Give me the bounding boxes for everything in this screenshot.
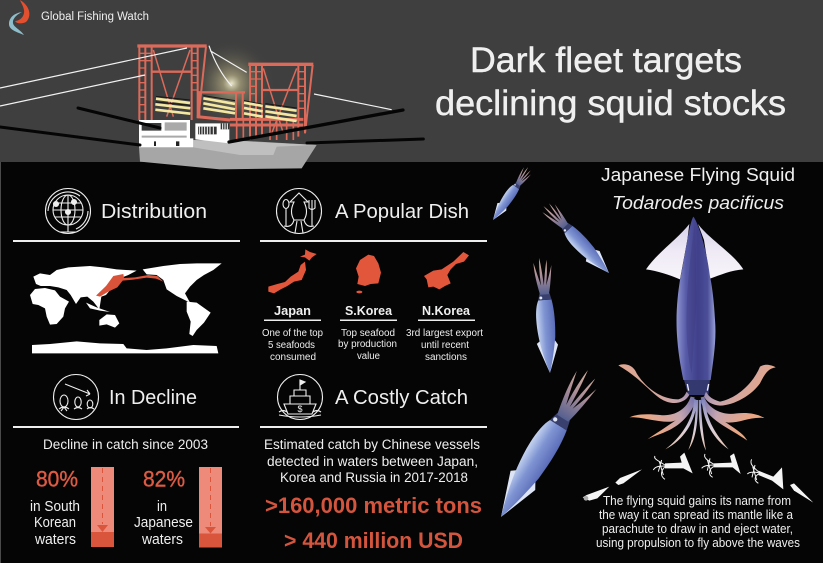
label: Japan: One of the top [262,328,323,339]
icon: ship with dollar sign [278,374,322,420]
icon: ship with dollar sign: $ [297,404,303,414]
illustration: flying squid sequence silhouettes [583,453,813,503]
label: Japan [262,303,323,363]
label: N.Korea: N.Korea [422,303,471,318]
heading: Distribution: Distribution [101,200,207,223]
bar: 80% decline [91,467,114,547]
illustration: large Japanese flying squid [618,217,776,451]
icon: squid with fork and spoon [276,188,322,234]
caption: flying squid: the way it can spread its mantle like a [599,508,793,522]
species title [601,164,795,213]
illustration: squid fishing vessel [0,40,423,169]
logo: Global Fishing Watch: Global Fishing Watch [41,11,149,23]
fins [646,224,689,279]
header band [0,0,823,162]
map: South Korea [356,255,381,293]
species title: Todarodes pacificus [612,192,784,213]
yellow lamp rows [155,98,297,121]
label: Japan: 5 seafoods [268,340,315,351]
world map [30,263,222,353]
stat: 80% in South Korean waters: 80% [36,466,78,492]
illustration: small squid 2 [539,199,615,279]
stat: 82% in Japanese waters: waters [141,532,183,548]
stat: metric tons: >160,000 metric tons [265,493,482,518]
label: Japan: consumed [270,352,316,363]
hull [139,140,317,169]
stat: 80% in South Korean waters [30,466,80,548]
label: Japan: Japan [274,303,311,318]
black outrigger poles [0,108,423,145]
map: North Korea [424,252,469,289]
illustration: small squid 4 [487,364,604,525]
label: N.Korea: sanctions [425,352,467,363]
superstructure [139,120,193,147]
panel: distribution [13,188,240,353]
label: S.Korea: by production [338,339,397,350]
panel: a popular dish [260,188,487,363]
black backing for lamp rows [156,96,297,108]
caption: flying squid: using propulsion to fly above the waves [596,536,800,550]
mantle [677,217,715,380]
lamp glow [188,40,275,127]
illustration: small squid 1 [488,165,534,223]
stat: 80% in South Korean waters: Korean [34,515,76,531]
caption: flying squid [596,494,800,550]
head [684,380,710,395]
arms [629,397,695,422]
label: N.Korea [406,303,483,363]
stat: 80% in South Korean waters: waters [34,532,76,548]
stat: 82% in Japanese waters [134,466,193,548]
description: Korea and Russia in 2017-2018 [280,470,468,485]
range of Japanese flying squid [96,274,163,297]
tentacles [618,364,689,403]
heading: In Decline: In Decline [109,386,197,409]
species title: Japanese Flying Squid [601,164,795,185]
stat: 80% in South Korean waters: in South [30,499,80,515]
title: Dark fleet targets [470,41,742,80]
description [264,437,480,485]
heading: A Popular Dish: A Popular Dish [335,200,469,223]
title: declining squid stocks [435,84,786,123]
stat: 82% in Japanese waters: Japanese [134,515,193,531]
label: N.Korea: 3rd largest export [406,328,483,339]
bar: 82% decline [199,467,222,548]
label: S.Korea: Top seafood [341,328,395,339]
stat: 82% in Japanese waters: in [157,499,167,515]
illustration: small squid 3 [531,257,560,374]
title [435,41,786,123]
description: Estimated catch by Chinese vessels [264,437,480,452]
red gantry frames [137,46,313,140]
heading: A Costly Catch: A Costly Catch [335,386,468,409]
logo: Global Fishing Watch [9,0,149,35]
icon: shrinking squid with down arrow [54,374,98,420]
stat: USD value: > 440 million USD [284,528,463,553]
map: Japan [268,249,317,293]
panel: a costly catch [260,374,487,553]
icon: globe with map pins [46,188,90,234]
white rigging lines [0,46,392,110]
caption: flying squid: parachute to draw in and eject water, [602,522,793,536]
caption: flying squid: The flying squid gains its name from [603,494,791,508]
subheading: Decline in catch since 2003 [43,437,208,452]
stat: 82% in Japanese waters: 82% [143,466,185,492]
panel: in decline [13,374,239,548]
description: detected in waters between Japan, [267,454,478,469]
label: S.Korea: S.Korea [345,303,393,318]
label: S.Korea [338,303,397,362]
label: N.Korea: until recent [421,340,469,351]
label: S.Korea: value [357,351,380,362]
